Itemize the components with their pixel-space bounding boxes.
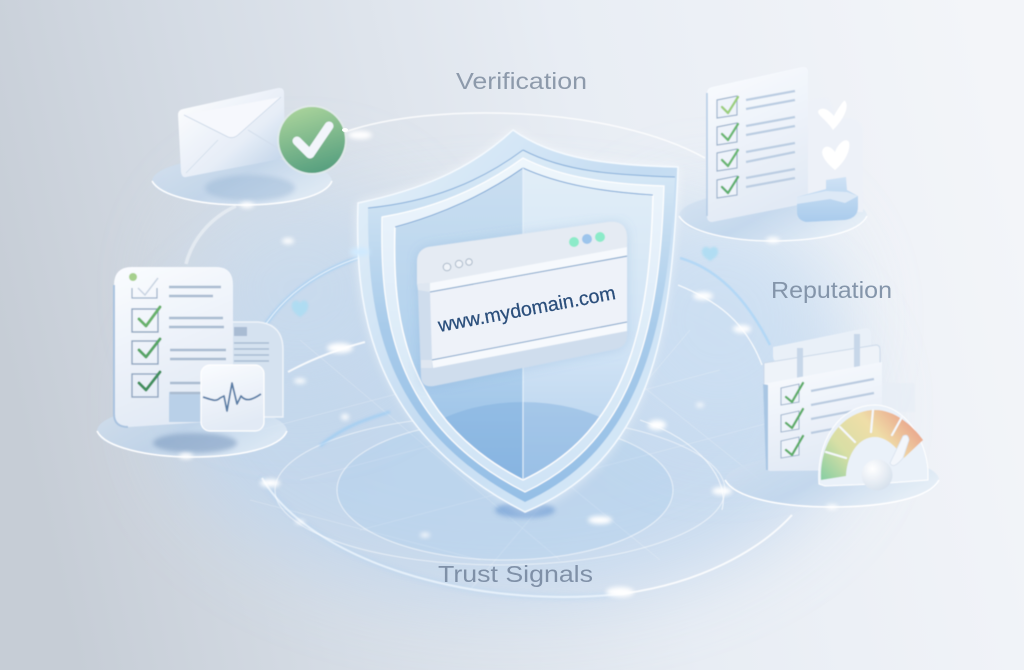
shield base glow bbox=[495, 502, 555, 518]
icon: pulse card bbox=[201, 365, 264, 431]
shield halo bbox=[358, 130, 678, 512]
icon: envelope bbox=[178, 88, 285, 177]
icon: blue box bbox=[797, 177, 858, 222]
clipboard binder bbox=[764, 328, 880, 385]
panel: checklist and health monitor bbox=[97, 267, 287, 457]
icon: upper heart bbox=[818, 101, 847, 130]
orbit rings and network grid bbox=[250, 113, 792, 597]
window band lines bbox=[430, 247, 627, 292]
shield third rim bbox=[382, 158, 664, 492]
window body bbox=[430, 257, 627, 360]
domain text: www.mydomain.com bbox=[435, 282, 617, 337]
shield inner panes bbox=[395, 170, 652, 479]
icon: green check badge bbox=[277, 105, 347, 175]
panel: reputation gauge bbox=[725, 328, 939, 507]
title bar bbox=[417, 222, 627, 284]
checklist document bbox=[707, 67, 808, 222]
window shadow bbox=[417, 223, 627, 387]
window controls right bbox=[569, 232, 605, 247]
shield middle rim bbox=[368, 150, 675, 502]
shield bbox=[358, 130, 678, 558]
small heart glow right bbox=[702, 247, 718, 261]
back card with hearts bbox=[808, 98, 863, 212]
browser window bbox=[417, 222, 627, 387]
platform bbox=[725, 453, 939, 507]
small heart glow left bbox=[292, 301, 308, 317]
window frame bbox=[417, 222, 627, 386]
label: Verification: Verification bbox=[456, 68, 587, 94]
platform bbox=[679, 191, 867, 241]
label: Trust Signals: Trust Signals bbox=[438, 561, 593, 587]
platform bbox=[97, 405, 287, 457]
platform bbox=[152, 157, 332, 205]
connector: envelope to checklist bbox=[186, 206, 236, 264]
checklist document bbox=[114, 267, 233, 427]
gauge needle bbox=[890, 435, 909, 466]
window controls left bbox=[443, 259, 472, 271]
panel: reviews checklist bbox=[679, 67, 867, 241]
sparkles bbox=[179, 128, 838, 597]
clipboard document bbox=[763, 362, 915, 471]
back document bbox=[225, 322, 283, 417]
icon: lower heart bbox=[822, 140, 849, 170]
shield outer rim bbox=[358, 130, 678, 512]
gauge knob bbox=[862, 460, 892, 490]
panel: email verified bbox=[152, 88, 347, 205]
label: Reputation: Reputation bbox=[771, 277, 892, 303]
gauge chart bbox=[819, 405, 928, 490]
